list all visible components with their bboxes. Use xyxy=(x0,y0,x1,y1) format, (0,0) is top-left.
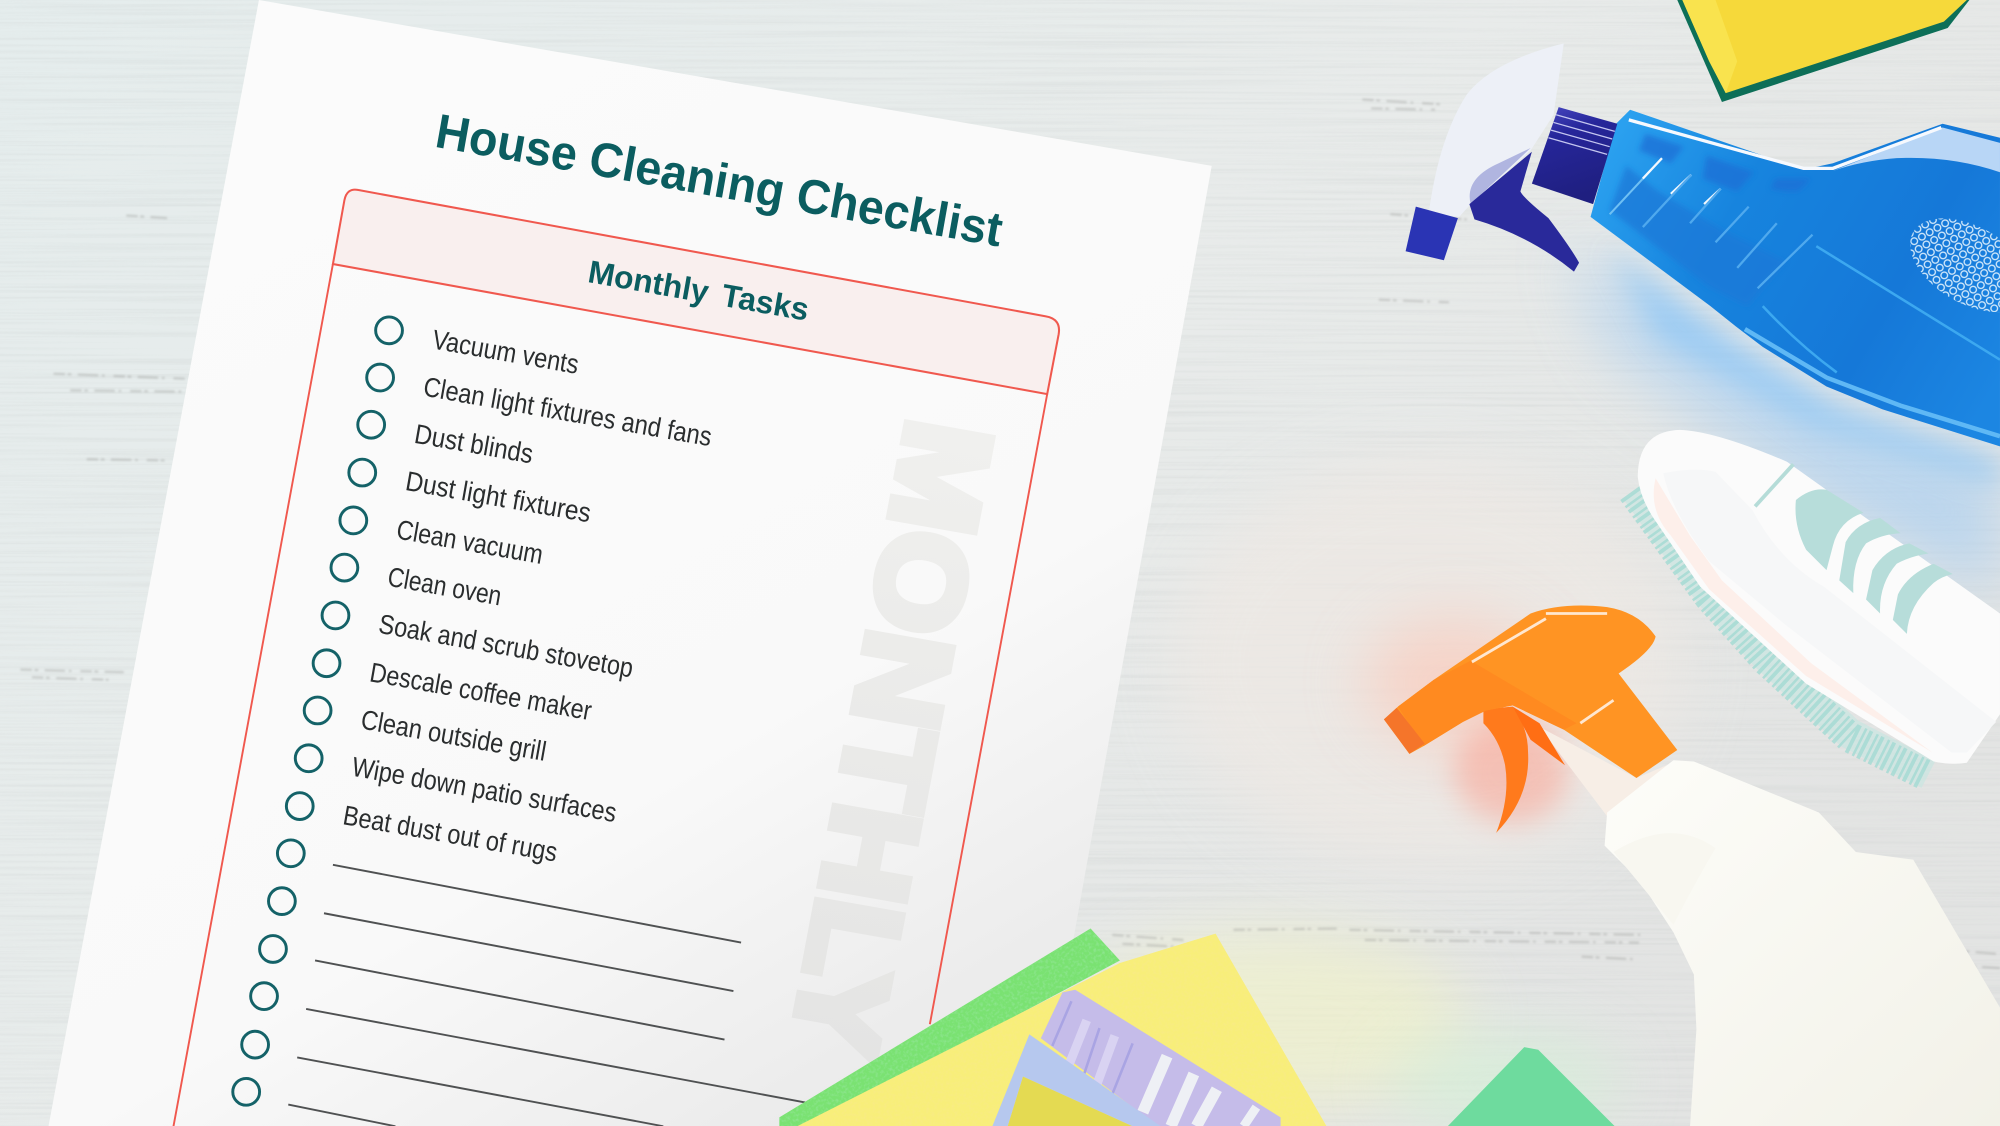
peach edge xyxy=(1654,478,1932,753)
green sponge xyxy=(1448,1047,1615,1126)
cap xyxy=(1532,107,1617,204)
yellow sponge xyxy=(1677,0,1969,102)
bubble logo xyxy=(1894,199,2000,332)
bottle body xyxy=(1605,760,2000,1126)
translucent neck xyxy=(1540,727,1679,816)
task list: Clean light fixtures and fans xyxy=(421,371,714,452)
yellow microfiber towel xyxy=(797,934,1327,1126)
task list: Clean vacuum xyxy=(394,514,546,570)
thin teal line xyxy=(1755,464,1793,506)
measure marks xyxy=(1610,158,1662,214)
trigger xyxy=(1469,152,1579,272)
bottle facet xyxy=(1614,833,1716,925)
gloss highlights xyxy=(1472,614,1614,723)
handle xyxy=(1638,430,2000,764)
blue spray bottle xyxy=(1406,43,2000,446)
task list: Dust light fixtures xyxy=(403,465,593,528)
orange sprayer head xyxy=(1384,606,1677,778)
task list: Clean oven xyxy=(385,561,504,611)
checkbox circles xyxy=(233,317,402,1105)
task list: Soak and scrub stovetop xyxy=(377,608,636,683)
small scrub brush xyxy=(992,990,1281,1126)
bristles xyxy=(1041,990,1281,1126)
teal stripes xyxy=(1795,489,1953,634)
scrub brush with teal bristles xyxy=(1633,430,2000,775)
nozzle xyxy=(1406,207,1458,260)
task list: Vacuum vents xyxy=(430,324,581,380)
panel heading: Monthly Tasks xyxy=(586,253,812,328)
checklist sheet xyxy=(48,0,1212,1126)
wood flecks xyxy=(20,99,2000,968)
see-through frame interior xyxy=(1008,1077,1133,1126)
paper xyxy=(48,0,1212,1126)
neck dark panels xyxy=(1639,134,1811,191)
task list: Clean outside grill xyxy=(359,704,549,767)
blank write-in lines xyxy=(288,865,816,1126)
upper lit panel xyxy=(1833,128,2000,172)
inner light streak xyxy=(1763,246,2000,372)
sponge angled face xyxy=(1682,0,1737,93)
title: House Cleaning Checklist xyxy=(432,104,1007,257)
task list xyxy=(341,324,714,868)
darker band xyxy=(1398,661,1577,746)
orange inner trigger xyxy=(1513,707,1565,765)
watermark: MONTHLY: MONTHLY xyxy=(765,411,1019,1067)
sprayer shade xyxy=(1470,148,1531,204)
orange trigger finger xyxy=(1483,707,1528,833)
cap ribs xyxy=(1548,115,1615,154)
bristles xyxy=(1636,491,1929,774)
nozzle tip xyxy=(1384,708,1425,754)
task list: Beat dust out of rugs xyxy=(341,799,560,868)
panel border xyxy=(173,264,1047,1126)
bottle body xyxy=(1591,110,2000,446)
panel: monthly tasks header xyxy=(333,190,1059,394)
task list: Descale coffee maker xyxy=(368,656,594,726)
brush frame xyxy=(992,1034,1161,1126)
task list: Wipe down patio surfaces xyxy=(350,751,619,828)
task list: Dust blinds xyxy=(412,418,536,469)
highlight edge xyxy=(1629,120,1941,168)
clear sprayer head xyxy=(1429,43,1564,217)
white spray bottle xyxy=(1384,606,2000,1126)
bottom edge light xyxy=(1745,329,2000,436)
inner plate xyxy=(1663,470,1996,753)
green microfiber towel xyxy=(779,929,1120,1126)
